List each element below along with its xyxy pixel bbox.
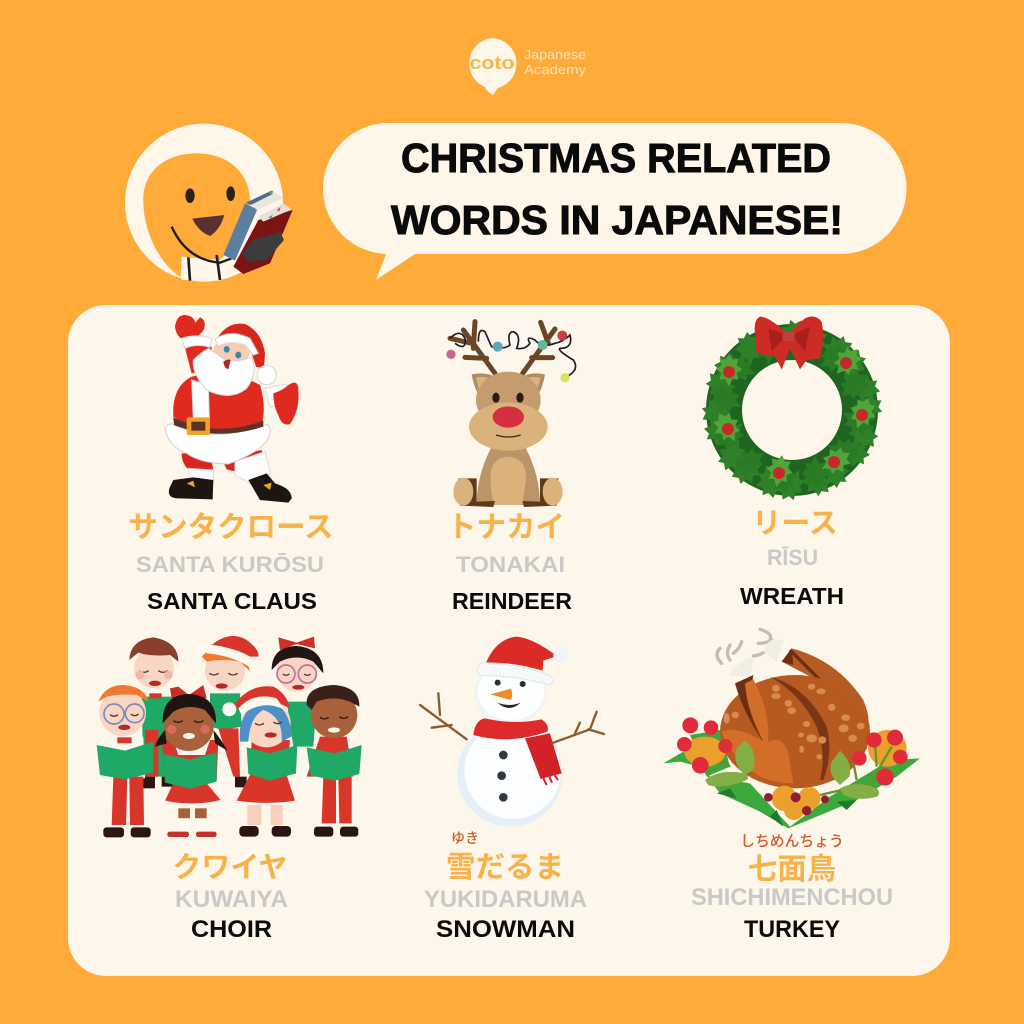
front row child 4 xyxy=(307,685,362,837)
icon: wreath xyxy=(696,314,888,506)
text: reindeer: REINDEER xyxy=(452,588,572,614)
text: turkey xyxy=(691,833,893,943)
text: snowman: 雪だるま xyxy=(446,851,564,884)
title line 1: CHRISTMAS RELATED xyxy=(401,135,831,181)
icon: carol choir xyxy=(97,636,362,837)
text: turkey: SHICHIMENCHOU xyxy=(691,884,893,911)
mascot: smiling character holding books xyxy=(125,124,293,282)
icon: reindeer xyxy=(446,322,576,507)
text: turkey: TURKEY xyxy=(744,916,840,943)
text: reindeer xyxy=(447,511,572,614)
text: Santa Claus: SANTA CLAUS xyxy=(147,588,317,614)
icon: Santa Claus xyxy=(165,315,299,503)
front row child 3 xyxy=(222,686,297,837)
text: Santa Claus: SANTA KURŌSU xyxy=(136,552,324,577)
right garnish xyxy=(868,730,907,767)
text: snowman: ゆき xyxy=(451,830,479,846)
text: Santa Claus xyxy=(128,511,334,614)
text: turkey: しちめんちょう xyxy=(740,833,844,850)
text: choir: CHOIR xyxy=(191,916,272,943)
left garnish xyxy=(693,733,730,767)
text: wreath: RĪSU xyxy=(767,545,818,570)
text: reindeer: トナカイ xyxy=(447,511,565,544)
back row children xyxy=(129,636,323,788)
icon: snowman xyxy=(420,637,604,827)
steam xyxy=(717,629,772,663)
text: choir: KUWAIYA xyxy=(175,886,288,913)
text: Santa Claus: サンタクロース xyxy=(128,511,334,544)
logo: Coto Japanese Academy xyxy=(469,38,587,95)
text: wreath xyxy=(740,508,844,609)
text: choir: クワイヤ xyxy=(172,852,288,884)
text: snowman xyxy=(424,830,587,943)
greens xyxy=(663,752,920,828)
front row child 2 xyxy=(155,685,227,837)
logo: Coto Japanese Academy: Japanese xyxy=(524,47,586,62)
front row child 1 xyxy=(97,685,153,837)
text: wreath: WREATH xyxy=(740,583,844,609)
panel: vocabulary xyxy=(68,305,950,976)
title line 2: WORDS IN JAPANESE! xyxy=(391,197,843,243)
body xyxy=(782,648,869,730)
text: reindeer: TONAKAI xyxy=(456,552,565,577)
text: snowman: SNOWMAN xyxy=(436,916,575,943)
logo: Coto Japanese Academy: coto xyxy=(470,53,514,73)
text: choir xyxy=(172,852,288,943)
icon: roast turkey xyxy=(663,629,920,828)
text: wreath: リース xyxy=(752,508,838,540)
logo: Coto Japanese Academy: Academy xyxy=(524,62,587,77)
title speech bubble xyxy=(323,123,906,280)
text: snowman: YUKIDARUMA xyxy=(424,886,587,913)
center fruit xyxy=(772,786,797,811)
text: turkey: 七面鳥 xyxy=(748,853,836,886)
